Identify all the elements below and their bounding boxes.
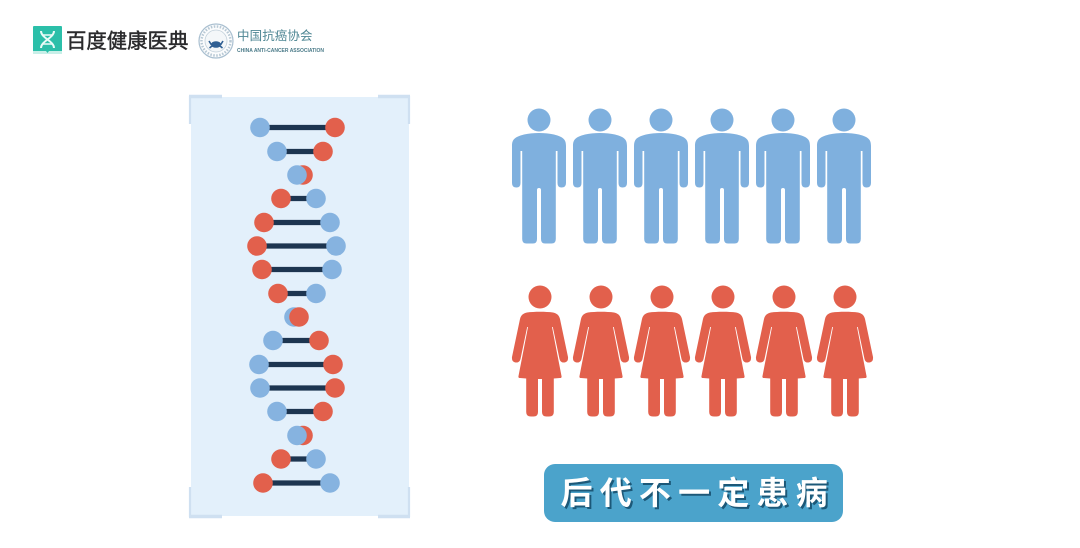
dna rungs (257, 128, 336, 483)
icon group: six red female figures (512, 286, 873, 416)
association Chinese name: 中国抗癌协会 (237, 28, 313, 43)
panel: DNA double helix (189, 96, 410, 517)
dna blue nucleotides (249, 118, 346, 493)
dna red nucleotides (247, 118, 345, 493)
association English name: CHINA ANTI-CANCER ASSOCIATION (237, 48, 324, 54)
logo wordmark: 百度健康医典 (66, 30, 188, 53)
callout shadow text: 后代不一定患病 (562, 477, 837, 513)
logo: China Anti-Cancer Association (199, 24, 324, 58)
dna overlapping blue nucleotides (287, 165, 307, 445)
corner brackets (189, 96, 410, 517)
callout: offspring may not develop the disease (544, 464, 843, 522)
callout background (544, 464, 843, 522)
icon group: six blue male figures (512, 108, 871, 244)
callout text: 后代不一定患病 (560, 475, 835, 511)
icon: teal book with DNA (33, 26, 62, 54)
logo: Baidu Health Encyclopedia (33, 26, 188, 54)
panel background (191, 97, 409, 516)
icon: association round seal (199, 24, 233, 58)
